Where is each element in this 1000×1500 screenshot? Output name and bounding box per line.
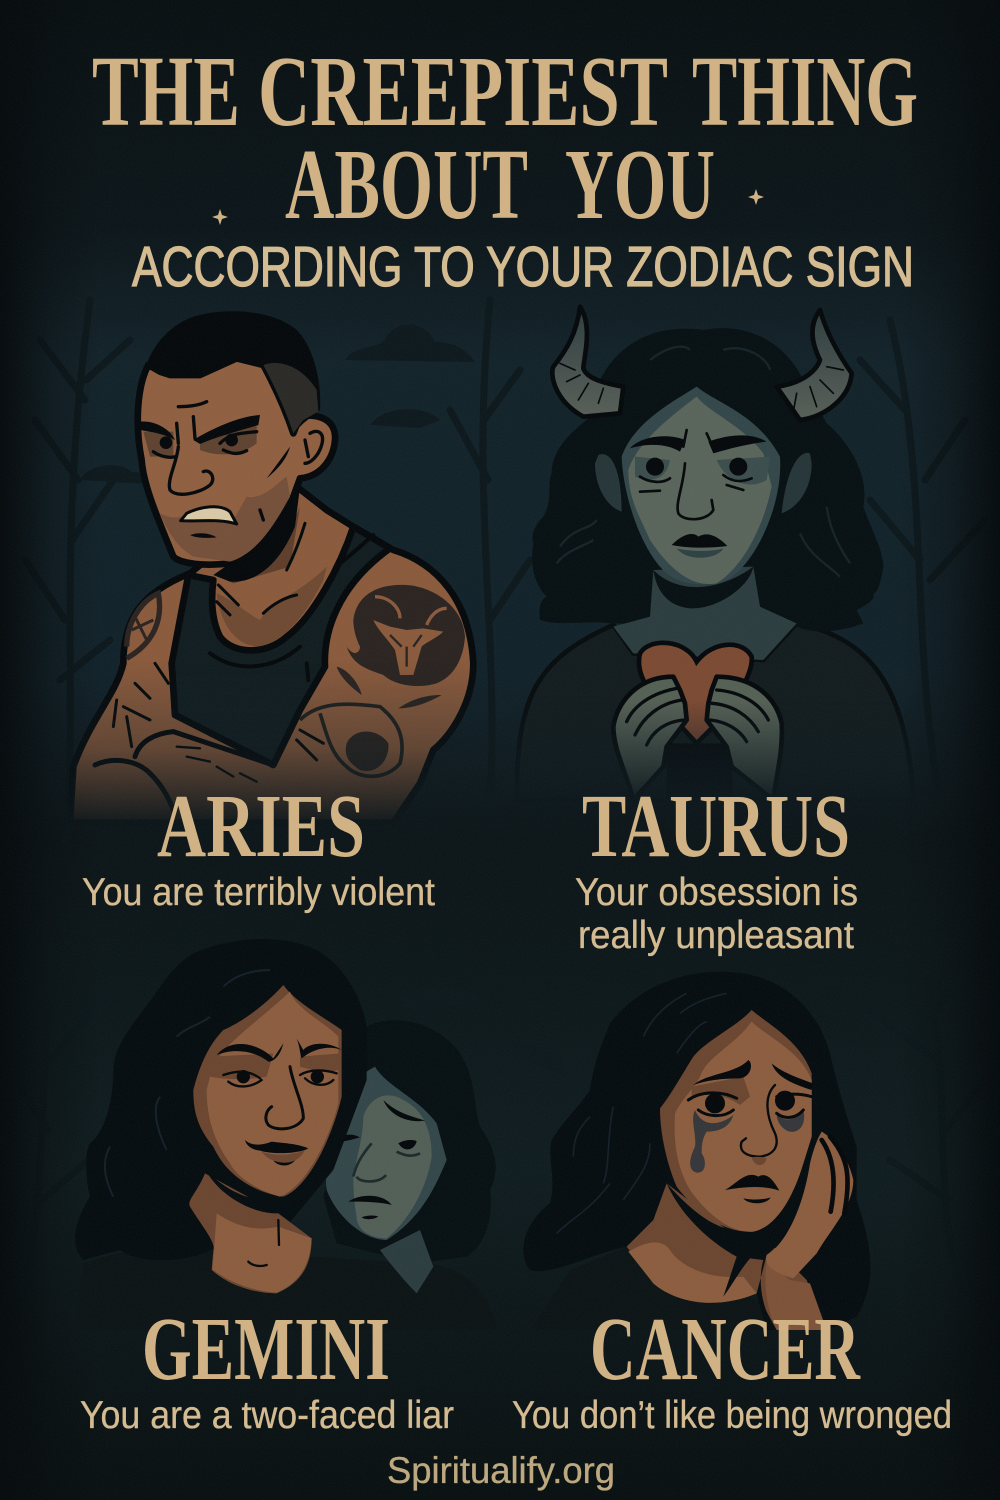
arm tattoos (337, 667, 442, 771)
hair (523, 972, 870, 1330)
sign name: CANCER (590, 1300, 861, 1399)
face (622, 387, 780, 584)
description (575, 871, 858, 957)
heading block (92, 35, 918, 299)
footer website: Spiritualify.org (387, 1450, 615, 1491)
grey twin hair (323, 1020, 496, 1263)
panel: taurus (517, 307, 913, 957)
panel: gemini (73, 939, 497, 1437)
hands: shadow (668, 744, 728, 760)
head (138, 358, 335, 565)
ram tattoo (347, 585, 465, 686)
sparkles (212, 189, 764, 225)
face features (693, 1060, 813, 1203)
tank top (172, 527, 390, 765)
ears (595, 453, 812, 513)
face features (630, 435, 767, 548)
jaw shadow (667, 1167, 803, 1330)
jaw shadow (213, 487, 300, 582)
sign name: TAURUS (582, 777, 850, 876)
grey twin neck (380, 1230, 433, 1293)
neck and chest (627, 1183, 827, 1330)
title line 1: THE (92, 35, 240, 147)
main hair (75, 939, 367, 1260)
illustration: horned woman holding heart (517, 307, 913, 800)
title line 2: YOU (565, 128, 715, 240)
crossed forearms (95, 732, 273, 810)
hand (766, 1132, 853, 1278)
torso and arms (70, 487, 473, 823)
illustration: crying woman (523, 972, 870, 1330)
illustration: angry tattooed man (70, 311, 473, 823)
sweater (516, 624, 911, 762)
hair (532, 328, 883, 631)
hands (613, 677, 687, 800)
clothes (73, 1249, 497, 1330)
hair (140, 311, 320, 433)
title line 1: CREEPIEST (258, 35, 668, 147)
main neck (189, 1173, 312, 1293)
description: You are terribly violent (82, 871, 435, 914)
illustration: two-faced women (73, 939, 497, 1330)
panel: aries (70, 311, 473, 914)
main jaw shadow (205, 1168, 320, 1213)
sign name: GEMINI (142, 1300, 390, 1399)
description: You are a two-faced liar (80, 1394, 454, 1437)
face (660, 1010, 812, 1232)
description: You don’t like being wronged (512, 1394, 952, 1437)
tear streaks (690, 1110, 733, 1173)
title line 1 (92, 35, 918, 147)
chest lines (217, 523, 305, 615)
sign name: ARIES (157, 777, 365, 876)
panel: cancer (512, 972, 952, 1437)
main face (193, 985, 342, 1197)
face features (140, 415, 290, 538)
description: really unpleasant (578, 914, 854, 957)
grey twin face (326, 1067, 447, 1240)
title line 2: ABOUT (285, 128, 528, 240)
hair highlights (557, 347, 850, 577)
neck (613, 567, 797, 660)
clothes (530, 1247, 827, 1330)
heart (639, 643, 752, 743)
main face features (217, 1038, 342, 1166)
description: Your obsession is (575, 871, 858, 914)
horns (552, 307, 623, 417)
